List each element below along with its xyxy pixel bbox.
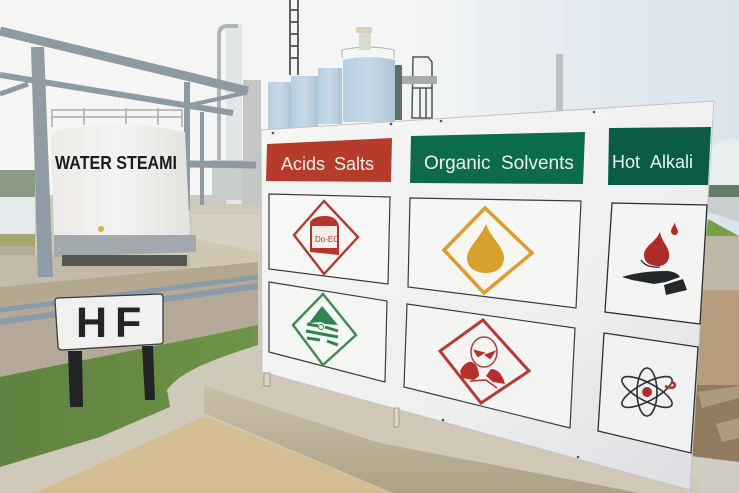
header: Organic Solvents [410, 132, 585, 184]
header: Acids Salts: Salts [334, 154, 374, 174]
lattice tower [290, 0, 298, 75]
header: Organic Solvents: Organic [424, 153, 491, 174]
icon: atom [618, 368, 676, 416]
panel: acids salts bottom [269, 282, 387, 382]
header: Hot Alkali [608, 127, 711, 185]
header: Acids Salts [266, 138, 392, 182]
HF label: HF [76, 299, 149, 347]
HF sign board [55, 294, 163, 350]
distillation column [212, 24, 261, 205]
steel frame [0, 31, 256, 210]
header: Hot Alkali: Alkali [650, 152, 693, 172]
sign mounting bolts [264, 373, 399, 427]
grass strip [0, 325, 258, 467]
panel: organic solvents bottom [404, 304, 575, 428]
concrete walkway [35, 416, 393, 493]
icon: toxic face diamond [440, 320, 529, 403]
header: Organic Solvents: Solvents [501, 153, 574, 174]
tank rail [52, 108, 182, 127]
header: Acids Salts: Acids [281, 154, 325, 174]
silos [268, 27, 563, 130]
sign board [261, 101, 714, 490]
icon: flammable drop diamond [444, 208, 532, 293]
pipes [0, 277, 258, 322]
panel: organic solvents top [408, 198, 581, 308]
icon: corrosive container diamond: Do-EO [315, 235, 339, 244]
tank label: WATER STEAMI [55, 153, 177, 173]
icon: drop over hot surface [622, 222, 687, 295]
sign screws [272, 111, 595, 458]
panel: hot alkali top [605, 203, 707, 324]
HF sign posts [68, 346, 155, 407]
concrete sign base [204, 366, 700, 493]
background: ground [0, 139, 739, 493]
panel: acids salts top [269, 194, 390, 284]
water steam tank [51, 124, 196, 266]
HF sign [55, 294, 163, 407]
steel column [31, 47, 53, 277]
header: Hot Alkali: Hot [612, 152, 640, 172]
panel: hot alkali bottom [598, 333, 698, 453]
background: sky [0, 0, 739, 240]
icon: green environment diamond [293, 294, 356, 365]
